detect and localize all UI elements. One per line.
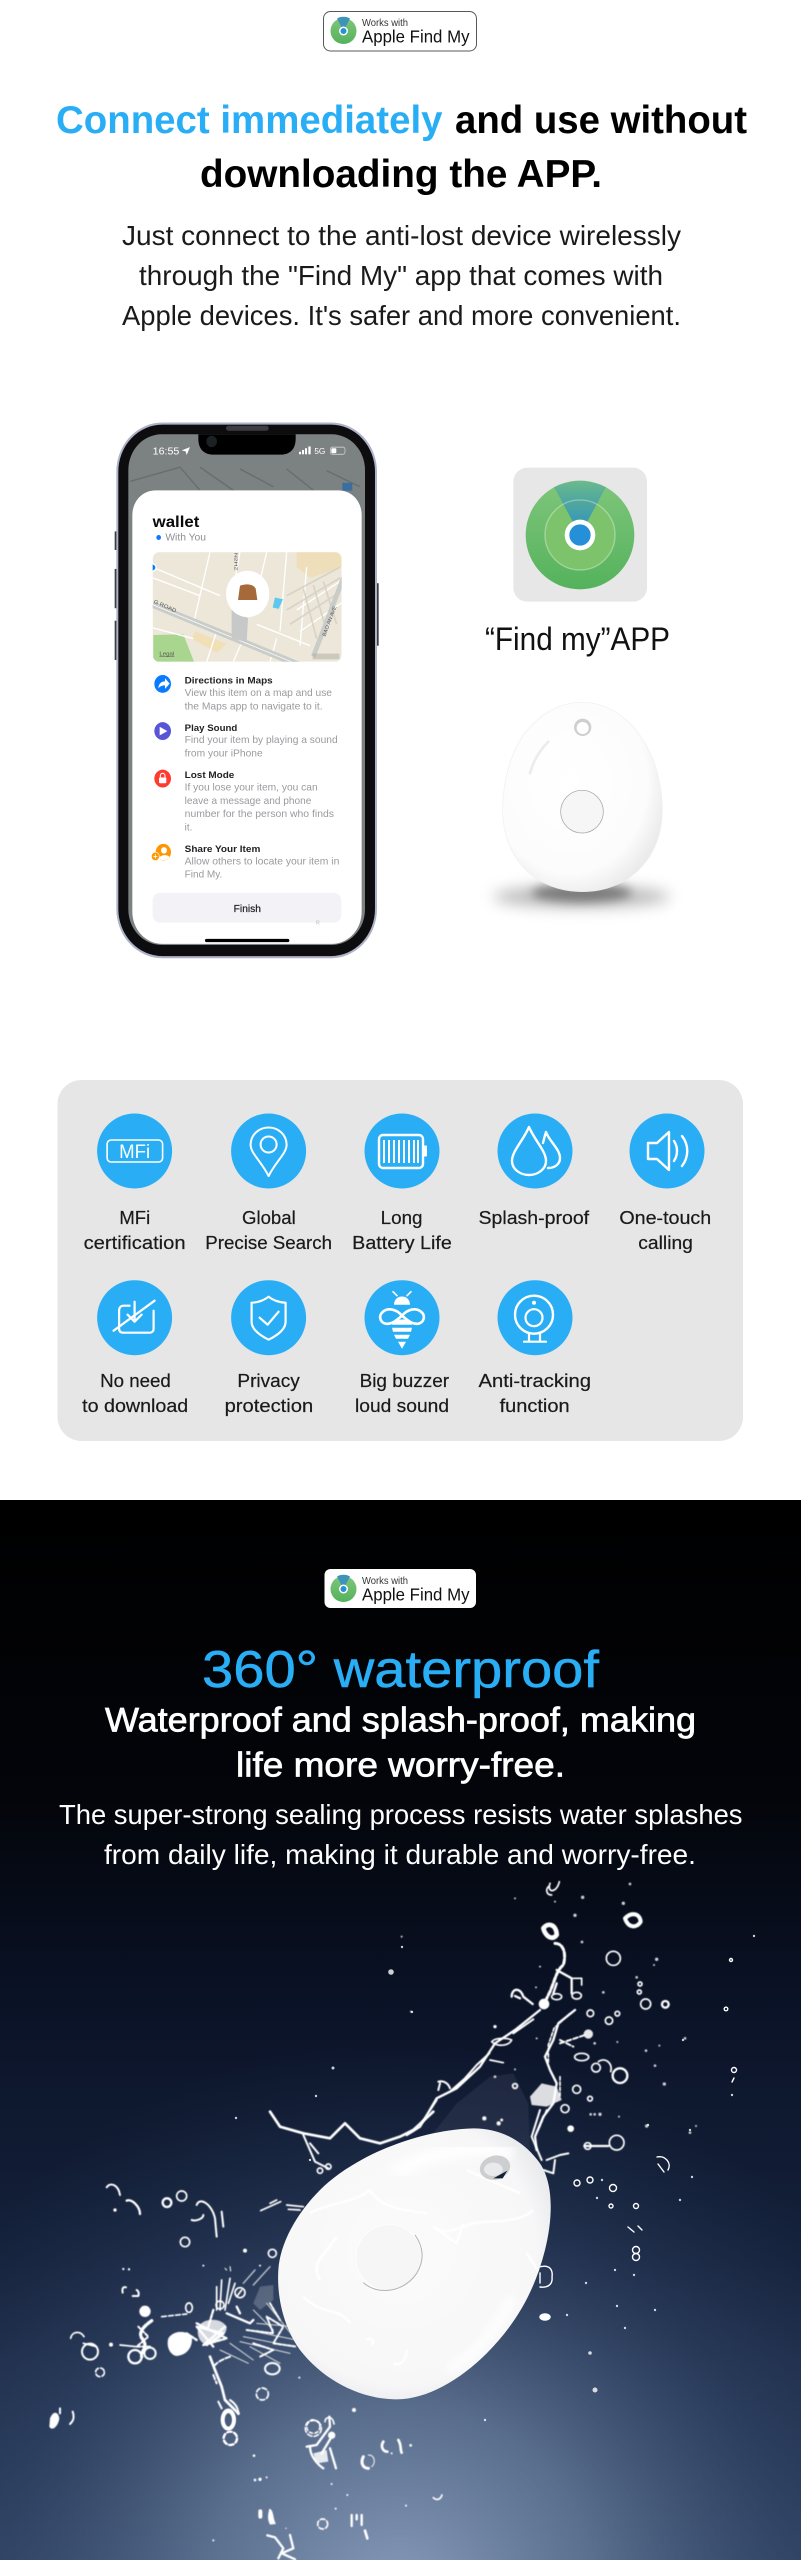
- panel: dark waterproof section background: [0, 1500, 801, 2560]
- feature: no need to download: No need: [100, 1371, 171, 1391]
- action: lost mode: [154, 770, 334, 833]
- action: lost mode: it.: [185, 822, 192, 833]
- feature: anti-tracking function: [478, 1280, 591, 1416]
- water splash: upper right: [401, 1882, 697, 2150]
- icon: speaker: [648, 1132, 687, 1170]
- feature: no need to download: [82, 1280, 188, 1416]
- badge: works with Apple Find My (dark section): [324, 1569, 476, 1608]
- label: Find my APP: “Find my”APP: [485, 621, 670, 657]
- feature: anti-tracking function: Anti-tracking: [478, 1371, 591, 1391]
- feature: global precise search: [205, 1114, 332, 1253]
- action: play sound: Find your item by playing a sound: [185, 735, 338, 746]
- feature: splash-proof: Splash-proof: [478, 1208, 590, 1228]
- feature: global precise search: Precise Search: [205, 1233, 332, 1253]
- icon: bee: [380, 1292, 424, 1349]
- subheading: waterproof and splash-proof: Waterproof and splash-proof, making: [105, 1702, 696, 1740]
- phone mockup: Find My screen: [115, 424, 379, 957]
- status bar: 16:55: [153, 446, 180, 457]
- phone mockup: Find My screen: R: [316, 921, 320, 927]
- action: play sound: Play Sound: [185, 723, 238, 733]
- intro text block: Apple devices. It's safer and more convenient.: [122, 300, 681, 331]
- icon: water drops: [512, 1127, 560, 1175]
- subheading: waterproof and splash-proof: life more worry-free.: [236, 1746, 565, 1784]
- feature: big buzzer loud sound: Big buzzer: [360, 1371, 449, 1391]
- feature: one-touch calling: One-touch: [619, 1208, 711, 1228]
- card: [132, 490, 362, 944]
- action: directions: Directions in Maps: [185, 675, 273, 686]
- feature: long battery life: Battery Life: [352, 1233, 452, 1253]
- icon: MFi: MFi: [119, 1142, 150, 1163]
- action: lost mode: number for the person who finds: [185, 809, 334, 820]
- icon: Find My app: [513, 468, 647, 602]
- action: lost mode: If you lose your item, you can: [185, 782, 318, 794]
- finish button: Finish: [234, 904, 261, 915]
- feature: global precise search: Global: [242, 1208, 296, 1228]
- heading: connect immediately: and use without: [455, 99, 747, 142]
- text block: sealing process: [59, 1799, 742, 1870]
- badge: works with Apple Find My: [324, 12, 476, 51]
- water splash: bottom centre: [212, 2400, 442, 2559]
- action: share item: [151, 844, 339, 881]
- action: lost mode: leave a message and phone: [185, 796, 311, 807]
- feature: long battery life: Long: [381, 1208, 422, 1228]
- heading: connect immediately: Connect immediately: [56, 99, 443, 142]
- water splash: lower left: [49, 2185, 330, 2447]
- feature: one-touch calling: [619, 1114, 711, 1253]
- intro text block: [122, 220, 681, 331]
- map: G ROAD: [153, 599, 177, 615]
- action: share item: Share Your Item: [185, 844, 260, 854]
- heading: 360 waterproof: 360° waterproof: [202, 1641, 600, 1699]
- badge: works with Apple Find My: Apple Find My: [362, 26, 470, 46]
- map: N2HZ: [232, 553, 238, 571]
- feature: anti-tracking function: function: [500, 1396, 570, 1416]
- icon: shield: [252, 1297, 286, 1340]
- action: directions: View this item on a map and use: [185, 688, 332, 699]
- product: white tracker tag: [493, 702, 670, 907]
- icon: webcam: [515, 1296, 553, 1342]
- badge: works with Apple Find My: Works with: [362, 18, 408, 29]
- feature: one-touch calling: calling: [638, 1233, 693, 1253]
- badge: works with Apple Find My (dark section): Apple Find My: [362, 1584, 470, 1604]
- feature: splash-proof: [478, 1114, 590, 1228]
- feature: MFi certification: certification: [84, 1233, 186, 1253]
- text block: sealing process: from daily life, making it durable and worry-free.: [104, 1839, 696, 1870]
- feature: no need to download: to download: [82, 1396, 188, 1416]
- icon: battery: [379, 1135, 427, 1168]
- notch: [198, 434, 296, 455]
- intro text block: through the "Find My" app that comes with: [139, 260, 663, 291]
- heading: connect immediately: [56, 99, 747, 196]
- action: directions: the Maps app to navigate to it.: [185, 701, 323, 712]
- action: lost mode: Lost Mode: [185, 770, 234, 780]
- map: [149, 552, 343, 665]
- panel: features: [58, 1080, 743, 1441]
- feature: MFi certification: MFi: [119, 1208, 150, 1228]
- water splash: scattered droplets on the right: [235, 1935, 755, 2421]
- map: Legal: [159, 651, 174, 657]
- icon: download crossed out: [114, 1301, 155, 1333]
- product: wet tracker tag: [278, 2128, 551, 2399]
- status bar: 5G: [314, 446, 325, 456]
- feature: big buzzer loud sound: [355, 1280, 449, 1416]
- badge: works with Apple Find My (dark section): Works with: [362, 1576, 408, 1587]
- action: share item: Find My.: [185, 869, 222, 881]
- map: BAO AN AVE: [322, 605, 339, 638]
- intro text block: Just connect to the anti-lost device wirelessly: [122, 220, 681, 251]
- feature: MFi certification: [84, 1114, 186, 1253]
- icon: map pin: [251, 1128, 287, 1176]
- action: share item: Allow others to locate your item in: [185, 856, 339, 867]
- subheading: waterproof and splash-proof: [105, 1702, 696, 1784]
- action: directions: [154, 675, 332, 712]
- phone mockup: Find My screen: wallet: [152, 513, 199, 531]
- text block: sealing process: The super-strong sealing process resists water splashes: [59, 1799, 742, 1830]
- phone mockup: Find My screen: With You: [165, 532, 206, 544]
- feature: privacy protection: Privacy: [237, 1371, 300, 1391]
- action: play sound: from your iPhone: [185, 748, 263, 760]
- water splash: arc over the tag: [270, 2110, 568, 2173]
- feature: privacy protection: protection: [225, 1396, 313, 1416]
- feature: long battery life: [352, 1114, 452, 1253]
- action: play sound: [154, 722, 338, 760]
- status bar: [153, 446, 345, 457]
- feature: privacy protection: [225, 1280, 313, 1416]
- finish button: [153, 893, 341, 922]
- heading: connect immediately: downloading the APP.: [200, 153, 602, 196]
- feature: big buzzer loud sound: loud sound: [355, 1396, 449, 1416]
